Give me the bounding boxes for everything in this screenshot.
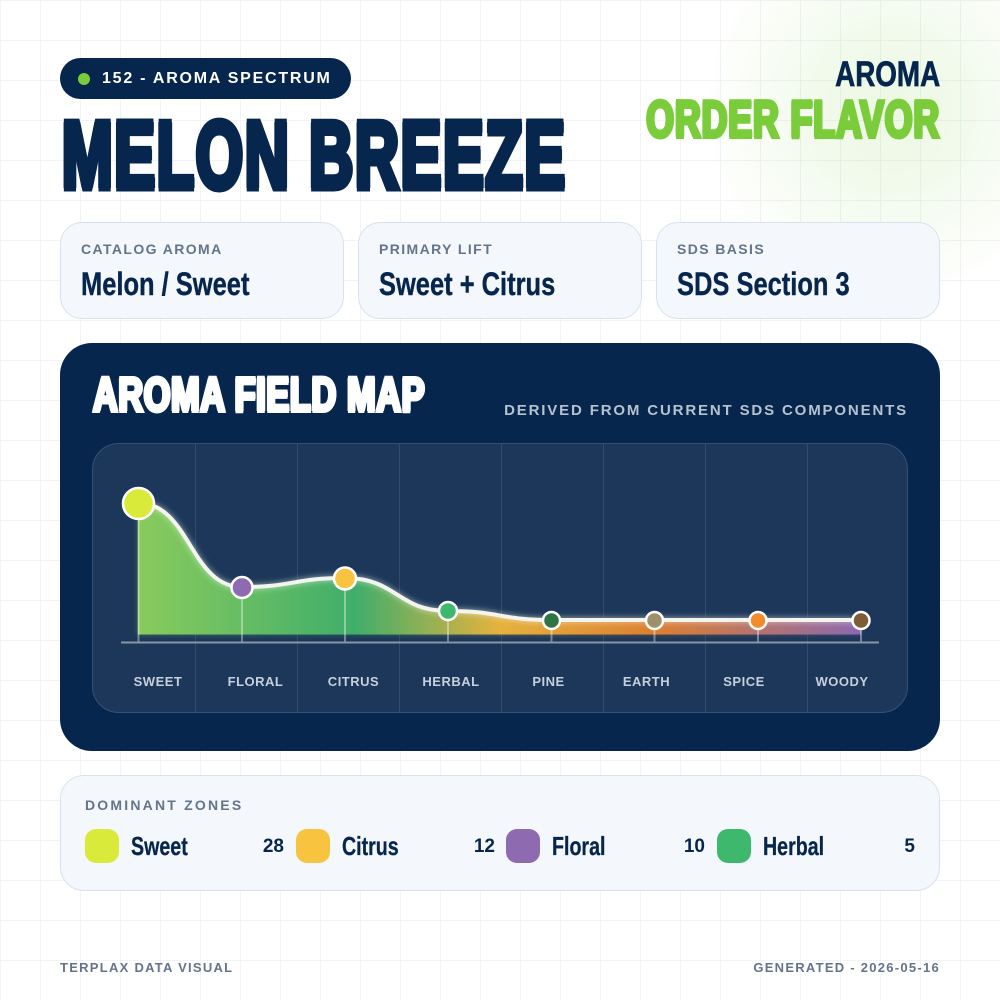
axis label: sweet: SWEET (134, 674, 182, 689)
legend heading: DOMINANT ZONES (85, 797, 243, 813)
curve line (138, 503, 861, 620)
axis label: citrus: CITRUS (328, 674, 379, 689)
panel: aroma field map (60, 343, 940, 751)
legend value: citrus: 12 (474, 836, 495, 857)
title: MELON BREEZE (62, 102, 567, 209)
panel: dominant zones (60, 775, 940, 891)
badge text: 152 - AROMA SPECTRUM (102, 70, 332, 87)
legend swatch: herbal (717, 829, 751, 863)
chart plot background (92, 444, 908, 712)
stems (138, 503, 861, 642)
legend swatch: citrus (296, 829, 330, 863)
card value: Sweet + Citrus (379, 266, 555, 302)
card value: SDS Section 3 (677, 266, 850, 302)
card: primary lift (358, 222, 642, 319)
card: catalog aroma (60, 222, 344, 319)
legend value: herbal: 5 (904, 836, 915, 857)
icon: green dot (78, 73, 90, 85)
card label: SDS BASIS (677, 241, 765, 257)
area fill (138, 503, 861, 634)
legend name: floral: Floral (552, 831, 605, 861)
axis label: woody: WOODY (815, 674, 869, 689)
legend name: sweet: Sweet (131, 831, 188, 861)
data points (123, 488, 870, 629)
legend name: herbal: Herbal (763, 831, 824, 861)
area glow (138, 503, 861, 634)
panel subtitle: DERIVED FROM CURRENT SDS COMPONENTS (504, 402, 908, 419)
axis label: pine: PINE (532, 674, 565, 689)
card label: PRIMARY LIFT (379, 241, 493, 257)
legend value: floral: 10 (684, 836, 705, 857)
legend name: citrus: Citrus (342, 831, 399, 861)
footer left: TERPLAX DATA VISUAL (60, 960, 233, 975)
legend swatch: sweet (85, 829, 119, 863)
card value: Melon / Sweet (81, 266, 249, 302)
baseline axis (121, 642, 879, 644)
legend value: sweet: 28 (263, 836, 284, 857)
card: sds basis (656, 222, 940, 319)
axis label: spice: SPICE (723, 674, 765, 689)
axis label: herbal: HERBAL (422, 674, 480, 689)
heading: order flavor: ORDER FLAVOR (646, 91, 940, 149)
card label: CATALOG AROMA (81, 241, 223, 257)
badge: aroma spectrum (60, 58, 351, 99)
panel heading: AROMA FIELD MAP (93, 369, 425, 422)
kicker: aroma: AROMA (835, 55, 940, 94)
legend swatch: floral (506, 829, 540, 863)
axis label: floral: FLORAL (228, 674, 283, 689)
axis label: earth: EARTH (623, 674, 670, 689)
curve glow (138, 503, 861, 620)
footer right: GENERATED - 2026-05-16 (753, 960, 940, 975)
